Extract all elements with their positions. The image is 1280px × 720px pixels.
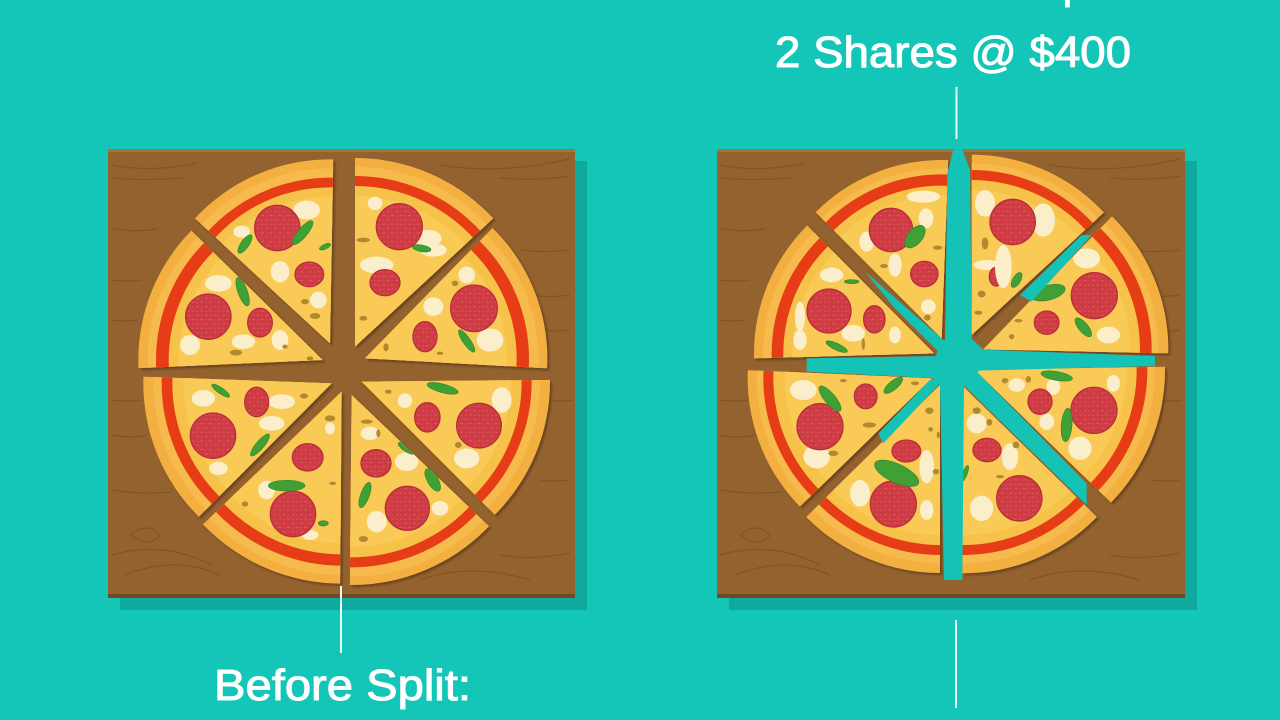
slice: top left upper (195, 159, 336, 346)
slice: bottom right (350, 395, 491, 588)
slice: bottom right (962, 387, 1099, 576)
panel: before split pizza (108, 149, 587, 610)
pizza slices (138, 158, 550, 585)
label: 2 shares at $400: 2 Shares @ $400 (775, 28, 1131, 77)
slice: left upper (138, 230, 325, 371)
slice: top right upper (355, 158, 496, 348)
slice: bottom left (806, 385, 943, 576)
connector line: top right (956, 87, 958, 139)
slice: top right upper (972, 154, 1106, 337)
slice: right lower (978, 366, 1168, 505)
slice: right upper (365, 228, 550, 372)
wooden board (717, 149, 1185, 598)
board shadow (729, 161, 1197, 610)
slice: bottom left (203, 392, 345, 586)
board shadow (120, 161, 587, 610)
slice: left lower (748, 370, 932, 509)
label: before split: Before Split: (214, 661, 471, 710)
wooden board (108, 149, 575, 598)
teal split cuts (807, 149, 1155, 580)
slice: left lower (143, 376, 334, 520)
pizza slices (748, 149, 1168, 580)
slice: right upper (984, 216, 1172, 356)
panel: after split pizza (717, 149, 1197, 610)
slice: right lower (362, 380, 553, 517)
slice: top left upper (816, 160, 950, 340)
connector line: bottom right (955, 620, 957, 708)
slice: left upper (754, 226, 936, 362)
connector line: bottom left (340, 586, 342, 653)
